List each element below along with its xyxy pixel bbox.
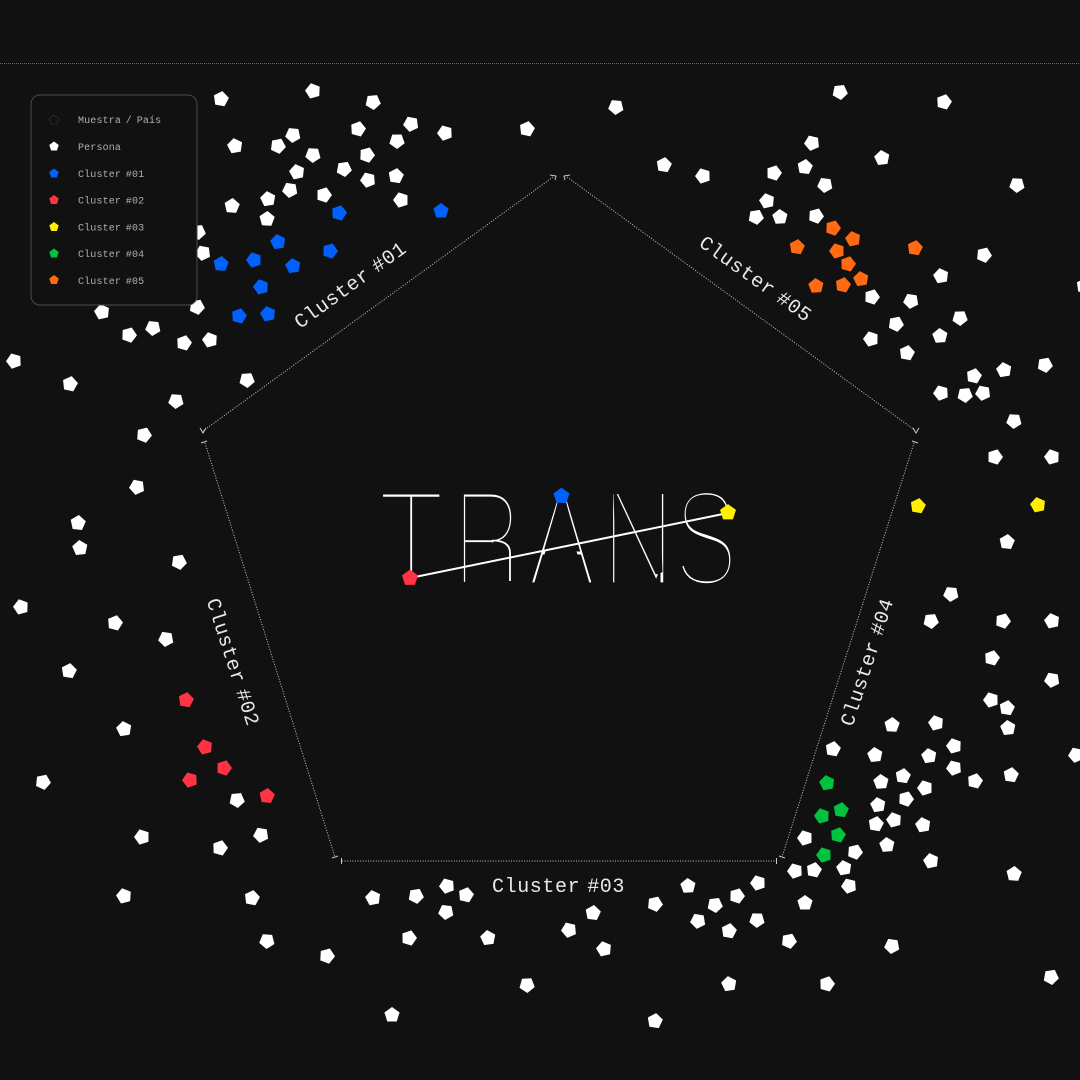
label: Cluster #05: Cluster #05 (694, 232, 815, 328)
node: red (402, 570, 418, 585)
legend row: Cluster #02: Cluster #02 (78, 196, 144, 208)
legend panel (31, 95, 197, 305)
title letters: N (601, 460, 675, 616)
legend row: Cluster #03: Cluster #03 (78, 222, 144, 234)
legend row: Cluster #04: Cluster #04 (78, 249, 144, 261)
legend row: Muestra / País (49, 115, 161, 127)
node: blue (554, 488, 569, 503)
cluster 05 dots: orange (789, 218, 924, 293)
title: TRANS with connected nodes (376, 460, 739, 617)
node: yellow (720, 504, 736, 519)
legend row: Cluster #05 (49, 275, 144, 288)
cluster 04 dots: green (812, 774, 850, 864)
R leg stroke (492, 540, 510, 581)
legend row: Persona (49, 142, 121, 154)
label: Cluster #02: Cluster #02 (200, 596, 263, 729)
title letters (376, 460, 739, 617)
label: Cluster #01: Cluster #01 (291, 238, 412, 335)
legend row: Cluster #03 (49, 222, 144, 234)
legend row: Cluster #04 (49, 249, 144, 261)
pentagon frame (200, 175, 919, 864)
title letters: T (376, 461, 446, 616)
legend row: Cluster #01: Cluster #01 (78, 169, 144, 181)
legend row: Cluster #05: Cluster #05 (78, 276, 144, 288)
label: Cluster #03: Cluster #03 (492, 876, 625, 899)
title letters: S (673, 460, 739, 616)
legend row: Muestra / País: Muestra / País (78, 115, 161, 127)
cluster 01 dots: blue (213, 203, 449, 324)
label: Cluster #04: Cluster #04 (837, 596, 900, 729)
legend row: Cluster #02 (49, 195, 144, 208)
cluster 03 dots: yellow (909, 496, 1047, 514)
legend row: Persona: Persona (78, 143, 121, 154)
title letters: R (452, 461, 522, 616)
cluster 02 dots: red (177, 691, 275, 803)
connecting line (410, 513, 728, 578)
legend row: Cluster #01 (49, 169, 144, 181)
title letters: A (527, 462, 597, 617)
